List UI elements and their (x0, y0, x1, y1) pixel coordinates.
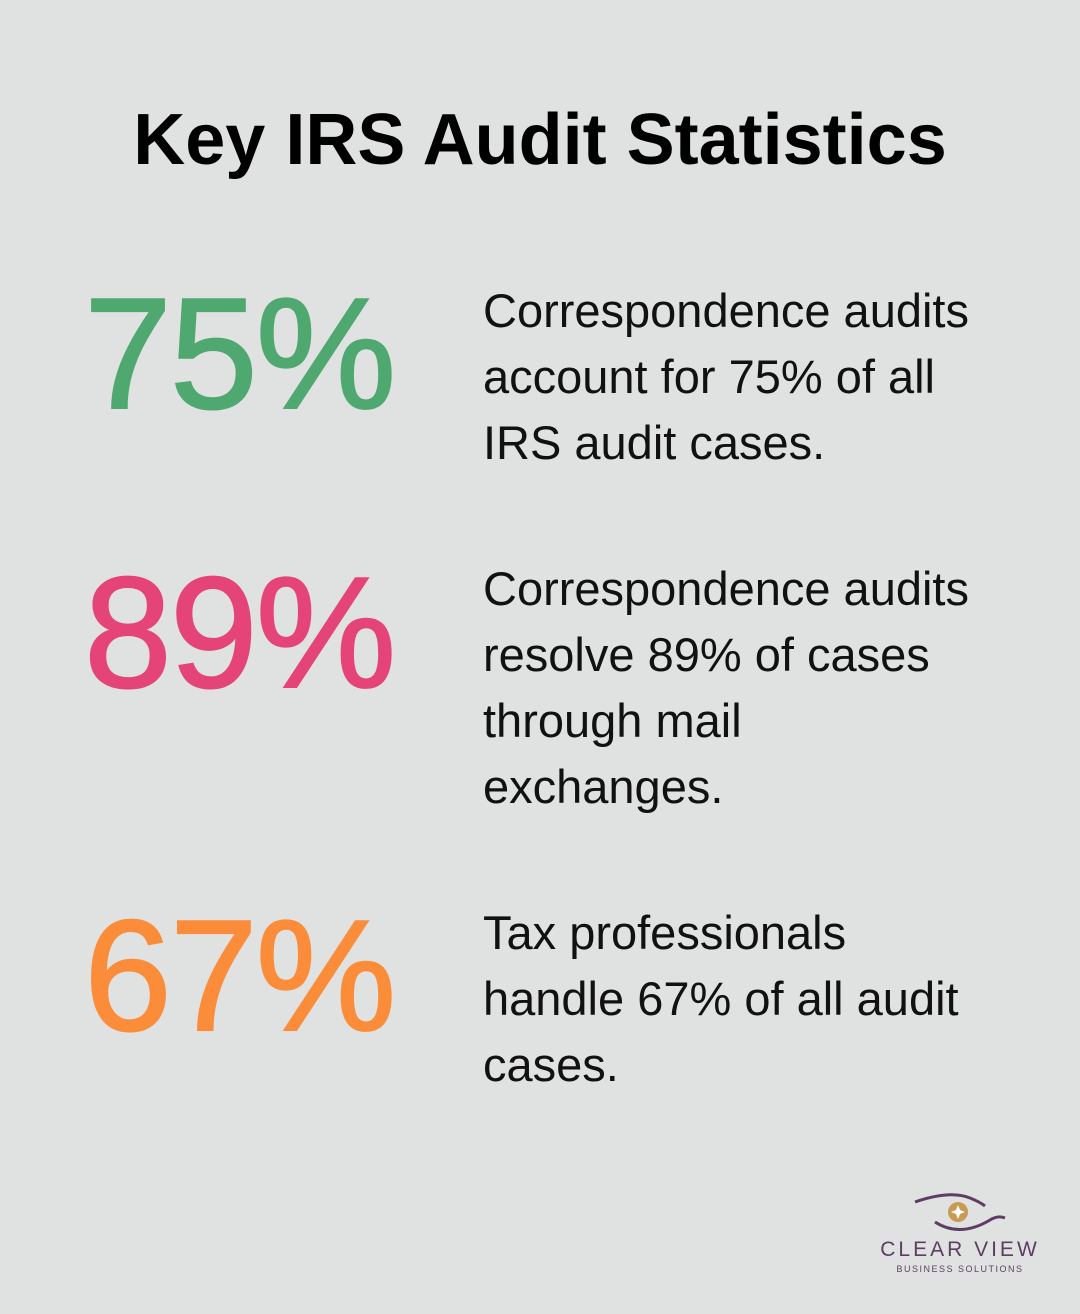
text: 75% description (483, 284, 969, 469)
text: 89% description (483, 562, 969, 813)
logo subtitle: BUSINESS SOLUTIONS (896, 1264, 1024, 1274)
logo text: CLEAR VIEW (880, 1238, 1040, 1261)
text: 67% description: cases. (483, 1038, 619, 1091)
text: 67% description: handle 67% of all audit (483, 972, 959, 1025)
stat: 67%: 67% (84, 888, 394, 1064)
text: 89% description: resolve 89% of cases (483, 628, 930, 681)
text: 89% description: through mail (483, 694, 742, 747)
text: 75% description: IRS audit cases. (483, 416, 825, 469)
title: Key IRS Audit Statistics (133, 100, 947, 180)
text: 89% description: Correspondence audits (483, 562, 969, 615)
text: 67% description: Tax professionals (483, 906, 846, 959)
text: 89% description: exchanges. (483, 760, 723, 813)
text: 75% description: Correspondence audits (483, 284, 969, 337)
text: 67% description (483, 906, 959, 1091)
text: 75% description: account for 75% of all (483, 350, 935, 403)
logo: Clear View (880, 1193, 1040, 1274)
stat: 75%: 75% (84, 266, 394, 442)
stat: 89%: 89% (84, 545, 394, 721)
icon: eye (914, 1193, 1006, 1231)
